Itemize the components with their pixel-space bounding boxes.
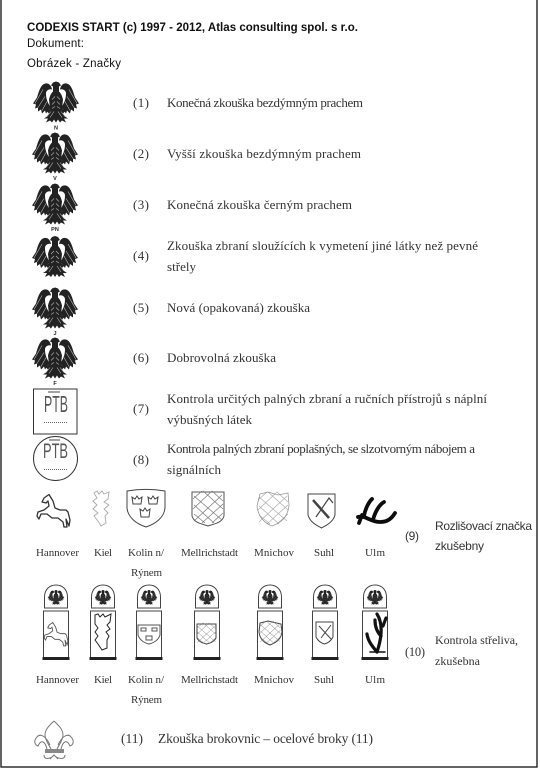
row 10 place labels: Ulm [365,674,385,686]
row 7 text: výbušných látek [167,412,252,427]
icon: Kolin shield [127,490,165,527]
row 3 text: Konečná zkouška černým prachem [167,197,352,212]
mark 5: eagle J [32,288,78,337]
mark 2: eagle V [32,132,78,182]
icon: post Hannover [42,585,70,660]
row 8 text: Kontrola palných zbraní poplašných, se slzotvorným nábojem a [167,441,475,456]
row 10 text: zkušebna [435,654,481,668]
mark 6: eagle F: F [53,381,57,387]
icon: post Kolin [136,585,162,660]
row 6 text: Dobrovolná zkouška [167,350,276,365]
row 10 place labels: Mnichov [254,674,294,686]
header text [27,22,358,70]
mark 8: PTB circle: PTB [43,440,68,463]
row 9 text [405,519,532,553]
row 10 place labels: Kiel [94,674,112,686]
header text: Dokument: [27,38,84,50]
mark 8: PTB circle [34,436,78,480]
row 9 text: Rozlišovací značka [435,519,532,533]
mark 7: PTB square [34,389,77,434]
icon: fleur-de-lis [35,721,73,759]
mark 2: eagle V: V [53,176,57,182]
mark 6: eagle F [32,338,78,387]
row 10 text: (10) [405,645,425,659]
row 5 text: Nová (opakovaná) zkouška [167,300,310,315]
icon: Ulm antler [358,499,395,523]
icon: Suhl shield [308,494,335,528]
row 10 text: Kontrola střeliva, [435,633,518,647]
row 2 text: (2) [133,146,149,161]
row 8 text: signálních [167,462,222,477]
row 10 place labels: Suhl [314,674,334,686]
row 5 text: (5) [133,300,149,315]
row 4 text: střely [167,259,196,274]
header text: Obrázek - Značky [27,58,121,70]
row 4 text: Zkouška zbraní sloužících k vymetení jiné látky než pevné [167,238,478,253]
row 10 text [405,633,518,668]
icon: post Suhl [312,585,338,660]
icon: post Mellrichstadt [194,585,220,660]
row 9 text: zkušebny [435,539,484,553]
row 10 ammunition marks [42,585,388,660]
row 1 text: Konečná zkouška bezdýmným prachem [167,95,363,110]
icon: post Mnichov [256,585,284,660]
row 1 text: (1) [133,95,149,110]
row 6 text: (6) [133,350,149,365]
row 11 text: Zkouška brokovnic – ocelové broky (11) [158,731,373,746]
icon: Kiel nettle [93,491,109,526]
row 7 text: (7) [133,401,149,416]
row 10 place labels: Mellrichstadt [181,674,238,686]
row 9 place labels: Kolin n/ [128,547,165,559]
row 9 place labels: Hannover [36,547,79,559]
icon: Hannover horse [37,494,70,527]
icon: post Ulm [362,585,388,660]
row 7 text [133,391,487,427]
mark 3: eagle PN: PN [51,227,59,233]
header text: CODEXIS START (c) 1997 - 2012, Atlas consulting spol. s r.o. [27,22,358,34]
row 2 text: Vyšší zkouška bezdýmným prachem [167,146,361,161]
row 9 icons [37,490,395,528]
mark 5: eagle J: J [53,331,57,337]
row 10 place labels [36,674,385,706]
row 4 text: (4) [133,248,149,263]
icon: post Kiel [90,585,116,660]
row 7 text: Kontrola určitých palných zbraní a ručních přístrojů s náplní [167,391,487,406]
row 9 place labels: Mnichov [254,547,294,559]
row 9 place labels: Suhl [314,547,334,559]
row 4 text [133,238,478,274]
icon: Mellrichstadt shield [192,491,224,526]
row 9 place labels: Rýnem [131,567,162,579]
mark 3: eagle PN [32,184,78,233]
mark 4: eagle [32,236,78,277]
icon: Mnichov shield [257,492,289,526]
row 10 place labels: Hannover [36,674,79,686]
row 9 text: (9) [405,529,419,543]
row 3 text: (3) [133,197,149,212]
mark 1: eagle N: N [54,126,58,132]
row 10 place labels: Rýnem [131,694,162,706]
row 8 text [133,441,475,477]
row 8 text: (8) [133,452,149,467]
row 9 place labels: Kiel [94,547,112,559]
row 9 place labels: Ulm [365,547,385,559]
row 10 place labels: Kolin n/ [128,674,165,686]
row 11 text: (11) [121,731,143,746]
mark 1: eagle N [33,82,79,132]
row 9 place labels: Mellrichstadt [181,547,238,559]
mark 7: PTB square: PTB [44,391,68,417]
row 9 place labels [36,547,385,579]
